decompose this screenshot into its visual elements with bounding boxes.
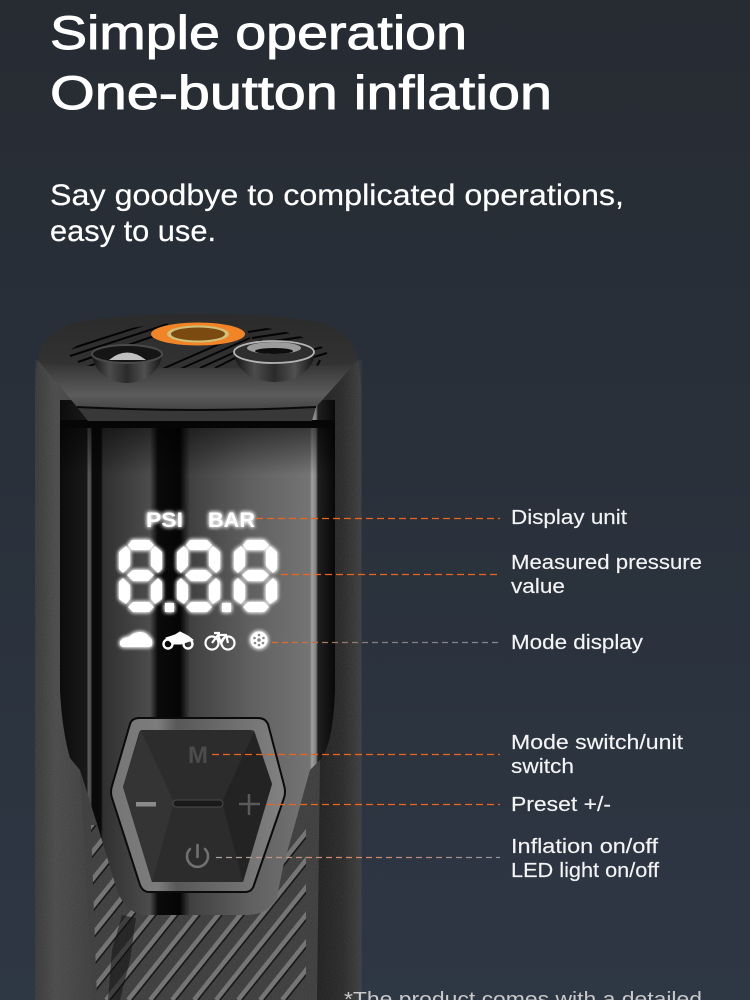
pressure value display — [119, 540, 277, 612]
diagonal grooves — [91, 825, 306, 1000]
title — [50, 6, 552, 119]
front button ring — [111, 718, 285, 892]
bevel under face — [77, 407, 316, 421]
title: Simple operation — [50, 6, 467, 59]
title: One-button inflation — [50, 66, 552, 119]
M key: M — [188, 742, 208, 769]
button slot — [173, 800, 223, 807]
subtitle — [50, 179, 624, 248]
callout: measured pressure value — [281, 551, 702, 598]
textured lower shell — [80, 760, 320, 1000]
left pad facet — [123, 731, 174, 882]
icon: motorcycle — [164, 632, 193, 648]
unit labels: PSI BAR: PSI — [146, 509, 183, 532]
dark blotch on shell — [108, 915, 136, 1000]
chamfered top face — [38, 360, 358, 410]
callout: display unit: Display unit — [511, 506, 627, 529]
right valve knob — [234, 341, 315, 382]
callout: inflation and LED on/off: LED light on/off — [511, 859, 659, 882]
subtitle: easy to use. — [50, 215, 216, 248]
callout: mode display: Mode display — [511, 631, 644, 654]
unit labels: PSI BAR: BAR — [208, 509, 255, 532]
left grip — [35, 360, 95, 1000]
left lamp knob — [92, 345, 162, 383]
unit labels: PSI BAR — [146, 509, 255, 532]
icon: wheel — [250, 632, 268, 648]
callout: mode switch/unit switch — [212, 731, 683, 778]
power key — [187, 845, 208, 867]
right grip — [316, 360, 361, 1000]
callout: inflation and LED on/off — [216, 835, 659, 882]
icon: car — [120, 632, 152, 647]
callout: measured pressure value: Measured pressure — [511, 551, 702, 574]
callout: inflation and LED on/off: Inflation on/off — [511, 835, 658, 858]
plus key — [239, 794, 260, 815]
button pad — [123, 730, 272, 882]
subtitle: Say goodbye to complicated operations, — [50, 179, 624, 212]
orange air port — [151, 322, 245, 346]
icon: bicycle — [206, 633, 234, 650]
right pad facet — [222, 732, 272, 882]
callout: mode switch/unit switch: switch — [511, 755, 574, 778]
minus key — [136, 802, 156, 806]
top cap — [38, 314, 358, 407]
dark bevel edge — [77, 407, 316, 410]
callout: measured pressure value: value — [511, 575, 565, 598]
air vents — [70, 324, 328, 368]
glossy front body — [60, 400, 335, 915]
product: tire inflator — [35, 314, 362, 1000]
screen top shade — [60, 420, 335, 475]
callout: mode switch/unit switch: Mode switch/unit — [511, 731, 683, 754]
grip texture — [35, 360, 362, 1000]
callout: preset +/-: Preset +/- — [511, 793, 611, 816]
black bevel line — [62, 420, 334, 428]
